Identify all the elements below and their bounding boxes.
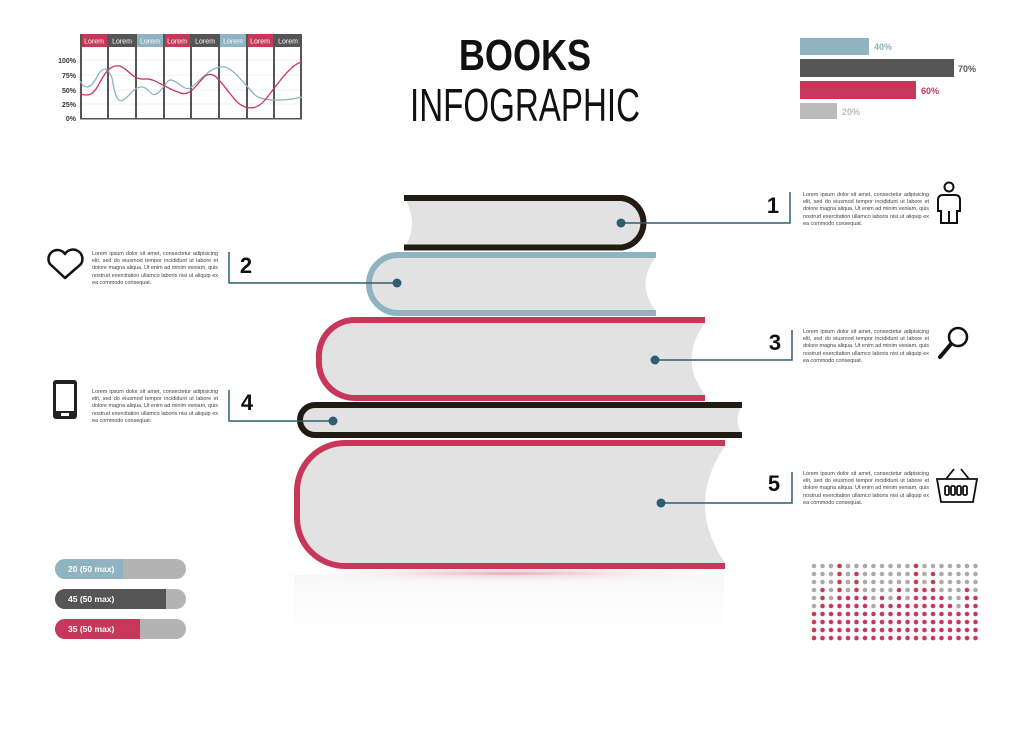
text block 4: Lorem ipsum dolor sit amet, consectetur adipisicing elit, sed do eiusmod tempor incididunt ut labore et dolore magna aliqua. Ut enim ad minim veniam, quis nostrud exercitation ullamco laboris nisi ut aliquip ex ea commodo consequat. — [92, 389, 218, 424]
line chart: 75% — [62, 73, 77, 80]
line chart: 0% — [66, 116, 77, 123]
icon: magnifier — [940, 328, 967, 357]
book reflection — [270, 564, 750, 665]
title: INFOGRAPHIC — [410, 81, 640, 131]
connector 5 — [656, 471, 792, 508]
icon: phone — [53, 380, 77, 419]
line chart: Lorem — [195, 38, 215, 46]
line chart: 25% — [62, 102, 77, 109]
line chart: 100% — [58, 58, 77, 65]
dot matrix — [812, 564, 978, 639]
title: BOOKS — [459, 31, 591, 80]
bar chart: percentages: 20% — [842, 107, 860, 117]
icon: person — [938, 182, 960, 223]
connector 5: 5 — [768, 471, 780, 496]
text block 2: Lorem ipsum dolor sit amet, consectetur adipisicing elit, sed do eiusmod tempor incididunt ut labore et dolore magna aliqua. Ut enim ad minim veniam, quis nostrud exercitation ullamco laboris nisi ut aliquip ex ea commodo consequat. — [92, 251, 218, 286]
connector 2 — [229, 252, 402, 288]
connector 3 — [650, 330, 792, 364]
icon: heart — [48, 250, 82, 278]
connector 2: 2 — [240, 253, 252, 278]
connector 1 — [616, 192, 790, 228]
title — [410, 31, 640, 131]
bar chart: percentages: 40% — [874, 42, 892, 52]
line chart — [58, 34, 302, 123]
text block 5: Lorem ipsum dolor sit amet, consectetur adipisicing elit, sed do eiusmod tempor incididunt ut labore et dolore magna aliqua. Ut enim ad minim veniam, quis nostrud exercitation ullamco laboris nisi ut aliquip ex ea commodo consequat. — [803, 471, 929, 506]
icon: basket — [937, 469, 977, 502]
bar chart: percentages: 60% — [921, 86, 939, 96]
bar chart: percentages: 70% — [958, 64, 976, 74]
connector 4 — [229, 390, 338, 426]
line chart: Lorem — [84, 38, 104, 46]
connector 3: 3 — [769, 330, 781, 355]
line chart: Lorem — [250, 38, 270, 46]
progress pills — [55, 559, 186, 639]
line chart: Lorem — [223, 38, 243, 46]
connector 4: 4 — [241, 390, 254, 415]
text block 3: Lorem ipsum dolor sit amet, consectetur adipisicing elit, sed do eiusmod tempor incididunt ut labore et dolore magna aliqua. Ut enim ad minim veniam, quis nostrud exercitation ullamco laboris nisi ut aliquip ex ea commodo consequat. — [803, 329, 929, 364]
line chart: 50% — [62, 88, 77, 95]
book 2 (blue) — [369, 255, 656, 313]
book 5 (red large) — [297, 443, 725, 566]
line chart: Lorem — [140, 38, 160, 46]
progress pills: 45 (50 max) — [68, 594, 114, 604]
connector 1: 1 — [767, 193, 779, 218]
book 4 (dark thin) — [300, 405, 742, 435]
bar chart: percentages — [800, 38, 976, 119]
progress pills: 20 (50 max) — [68, 564, 114, 574]
progress pills: 35 (50 max) — [68, 624, 114, 634]
line chart: Lorem — [112, 38, 132, 46]
line chart: Lorem — [167, 38, 187, 46]
book 1 (dark) — [404, 198, 644, 248]
line chart: Lorem — [278, 38, 298, 46]
text block 1: Lorem ipsum dolor sit amet, consectetur adipisicing elit, sed do eiusmod tempor incididunt ut labore et dolore magna aliqua. Ut enim ad minim veniam, quis nostrud exercitation ullamco laboris nisi ut aliquip ex ea commodo consequat. — [803, 192, 929, 227]
book 3 (red) — [319, 320, 705, 398]
